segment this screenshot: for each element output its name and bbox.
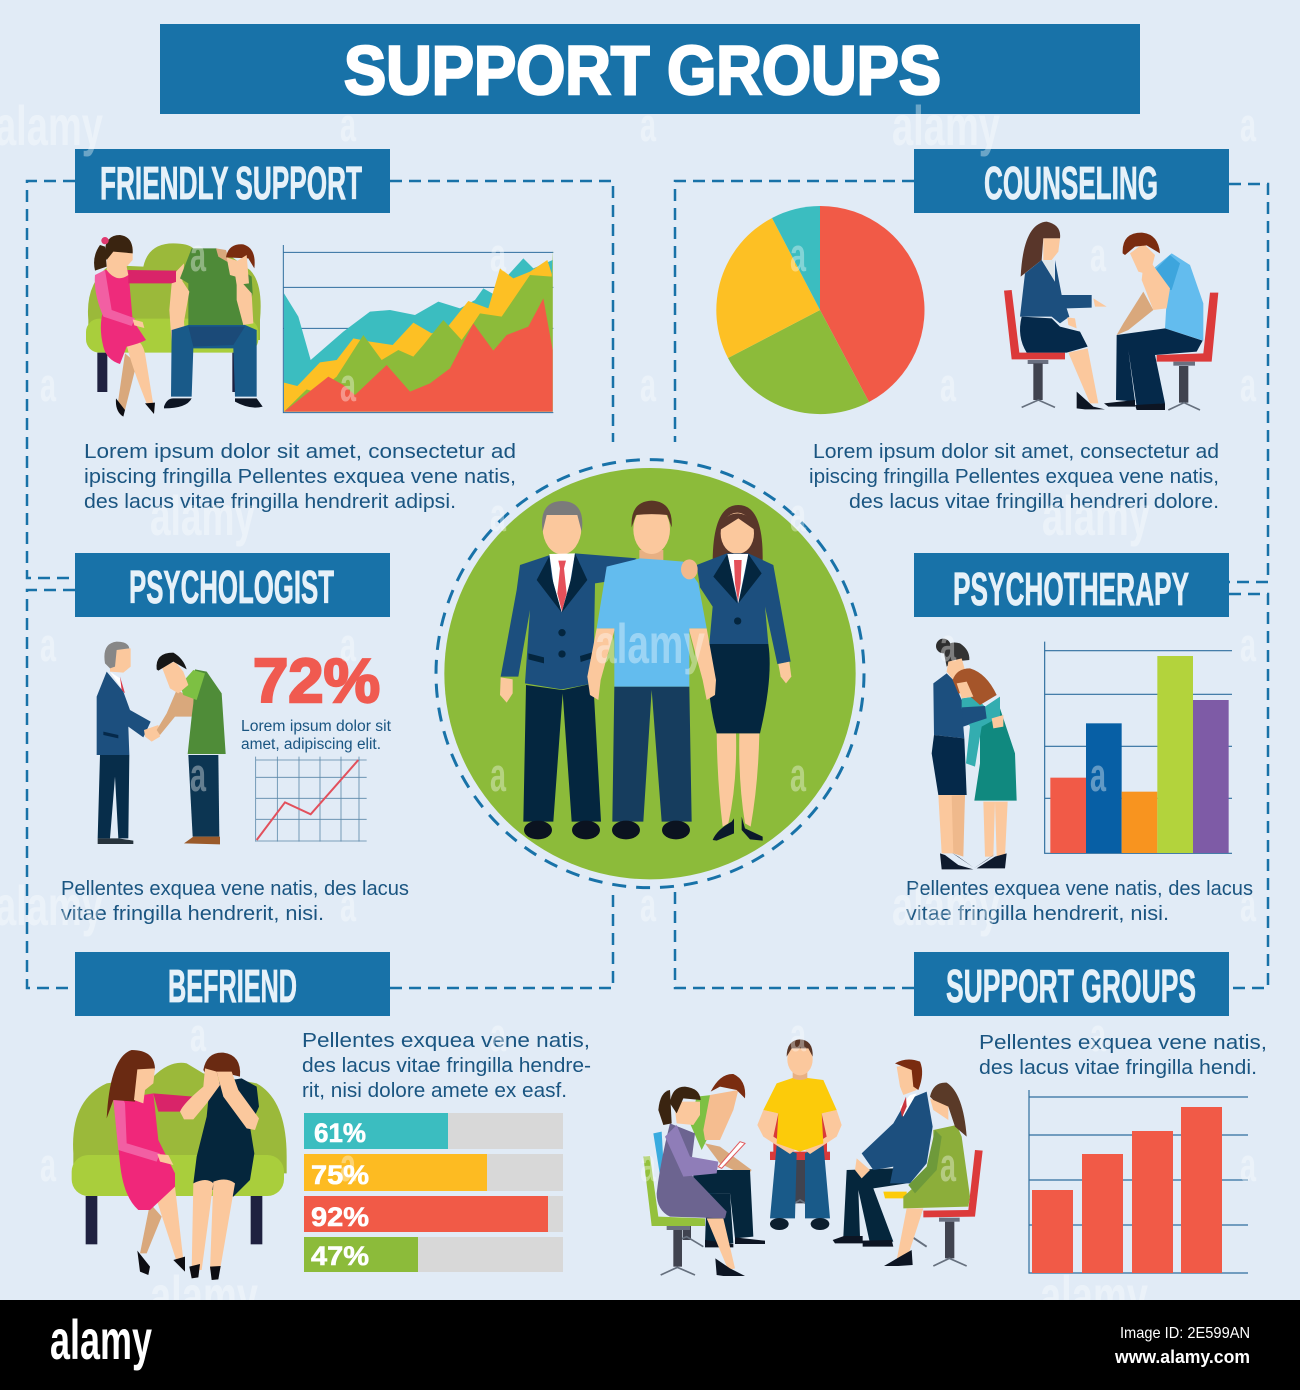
watermark marks: a	[340, 98, 357, 151]
watermark marks: a	[490, 748, 507, 801]
dashed connector lines	[27, 181, 1268, 988]
horizontal percentage bars: 75%	[311, 1160, 369, 1190]
footer bar: alamy	[50, 1308, 152, 1371]
watermark marks: alamy	[150, 1264, 258, 1327]
text: friendly support: des lacus vitae fringilla hendrerit adipsi.	[84, 491, 456, 513]
stat: 72 percent: Lorem ipsum dolor sit	[241, 718, 392, 735]
heading: friendly support: FRIENDLY SUPPORT	[100, 157, 362, 209]
stat: 72 percent	[241, 647, 392, 753]
heading: counseling	[914, 149, 1229, 213]
heading: friendly support	[75, 149, 390, 213]
watermark marks: alamy	[150, 484, 255, 547]
text: psychologist: vitae fringilla hendrerit, nisi.	[61, 903, 324, 925]
watermark marks: alamy	[892, 874, 1000, 937]
watermark marks: alamy	[1042, 484, 1150, 547]
watermark marks: a	[790, 228, 807, 281]
pie chart	[716, 206, 925, 414]
illustration: friendly couple on sofa	[86, 235, 263, 417]
watermark marks: a	[940, 618, 957, 671]
horizontal percentage bars: 47%	[311, 1241, 369, 1271]
watermark marks: a	[190, 1008, 207, 1061]
heading: support groups	[914, 952, 1229, 1016]
bar chart: psychotherapy	[1045, 642, 1232, 853]
text: counseling: des lacus vitae fringilla hendreri dolore.	[849, 491, 1219, 513]
illustration: two women on sofa	[72, 1050, 287, 1280]
watermark marks: a	[790, 1008, 807, 1061]
text: befriend: rit, nisi dolore amete ex easf.	[302, 1080, 567, 1102]
watermark marks: a	[1090, 1008, 1107, 1061]
watermark marks: alamy	[892, 94, 1000, 157]
watermark marks: a	[40, 618, 57, 671]
illustration: counseling session	[1004, 222, 1218, 410]
heading: counseling: COUNSELING	[984, 157, 1158, 209]
text: psychologist	[61, 878, 409, 925]
watermark marks: a	[40, 1138, 57, 1191]
watermark marks: a	[1240, 878, 1257, 931]
watermark marks: a	[490, 1008, 507, 1061]
stat: 72 percent: 72%	[253, 647, 380, 716]
text: befriend: Pellentes exquea vene natis,	[302, 1030, 590, 1052]
text: support groups	[979, 1032, 1267, 1079]
watermark marks: a	[640, 1138, 657, 1191]
text: psychotherapy: vitae fringilla hendrerit, nisi.	[906, 903, 1169, 925]
figure: older man in suit	[500, 501, 637, 839]
watermark marks: a	[190, 748, 207, 801]
watermark marks: a	[490, 488, 507, 541]
watermark marks: a	[1240, 618, 1257, 671]
watermark marks: a	[340, 618, 357, 671]
watermark marks: a	[340, 878, 357, 931]
watermark marks: alamy	[595, 612, 705, 675]
watermark marks: a	[1090, 228, 1107, 281]
title banner	[160, 24, 1140, 114]
illustration: psychologist handshake	[97, 642, 226, 844]
watermark marks: a	[640, 98, 657, 151]
footer bar: www.alamy.com	[1114, 1347, 1250, 1367]
text: counseling: Lorem ipsum dolor sit amet, consectetur ad	[813, 441, 1219, 463]
text: psychotherapy	[906, 878, 1253, 925]
heading: befriend	[75, 952, 390, 1016]
text: counseling: ipiscing fringilla Pellentes exquea vene natis,	[809, 466, 1219, 488]
watermark marks: a	[940, 1138, 957, 1191]
horizontal percentage bars: 92%	[311, 1202, 369, 1232]
illustration: seated support group	[643, 1039, 983, 1276]
title banner: SUPPORT GROUPS	[344, 32, 941, 109]
figure: middle man in blue shirt	[587, 501, 716, 839]
watermark marks: a	[490, 228, 507, 281]
text: support groups: Pellentes exquea vene natis,	[979, 1032, 1267, 1054]
stat: 72 percent: amet, adipiscing elit.	[241, 736, 381, 753]
watermark marks: a	[790, 488, 807, 541]
text: psychologist: Pellentes exquea vene natis, des lacus	[61, 878, 409, 900]
heading: psychotherapy	[914, 553, 1229, 617]
bar chart: support groups	[1029, 1090, 1248, 1273]
watermark marks: a	[1090, 748, 1107, 801]
watermark marks: a	[640, 358, 657, 411]
watermark marks: a	[340, 1138, 357, 1191]
watermark marks: a	[1240, 98, 1257, 151]
text: befriend	[302, 1030, 591, 1102]
text: befriend: des lacus vitae fringilla hendre-	[302, 1055, 591, 1077]
watermark marks: a	[940, 358, 957, 411]
text: friendly support: Lorem ipsum dolor sit amet, consectetur ad	[84, 441, 516, 463]
watermark marks: a	[340, 358, 357, 411]
watermark marks: a	[640, 878, 657, 931]
text: friendly support: ipiscing fringilla Pellentes exquea vene natis,	[84, 466, 516, 488]
text: counseling	[809, 441, 1219, 513]
line chart	[256, 757, 367, 842]
watermark marks: a	[190, 228, 207, 281]
watermark marks: a	[1240, 1138, 1257, 1191]
heading: psychologist: PSYCHOLOGIST	[129, 561, 334, 613]
heading: befriend: BEFRIEND	[168, 960, 297, 1012]
central circle with three people	[436, 460, 864, 888]
text: friendly support	[84, 441, 516, 513]
horizontal percentage bars: 61%	[314, 1118, 366, 1148]
heading: psychologist	[75, 553, 390, 617]
figure: woman in suit	[697, 505, 791, 841]
footer bar: Image ID: 2E599AN	[1120, 1325, 1250, 1342]
footer bar	[0, 1300, 1300, 1390]
watermark marks: a	[790, 748, 807, 801]
area chart	[283, 245, 553, 413]
watermark marks: alamy	[1040, 1264, 1148, 1327]
illustration: two women hugging	[932, 639, 1017, 869]
watermark marks: a	[40, 358, 57, 411]
text: psychotherapy: Pellentes exquea vene natis, des lacus	[906, 878, 1253, 900]
horizontal percentage bars	[304, 1113, 563, 1272]
text: support groups: des lacus vitae fringilla hendi.	[979, 1057, 1257, 1079]
watermark marks: a	[1240, 358, 1257, 411]
